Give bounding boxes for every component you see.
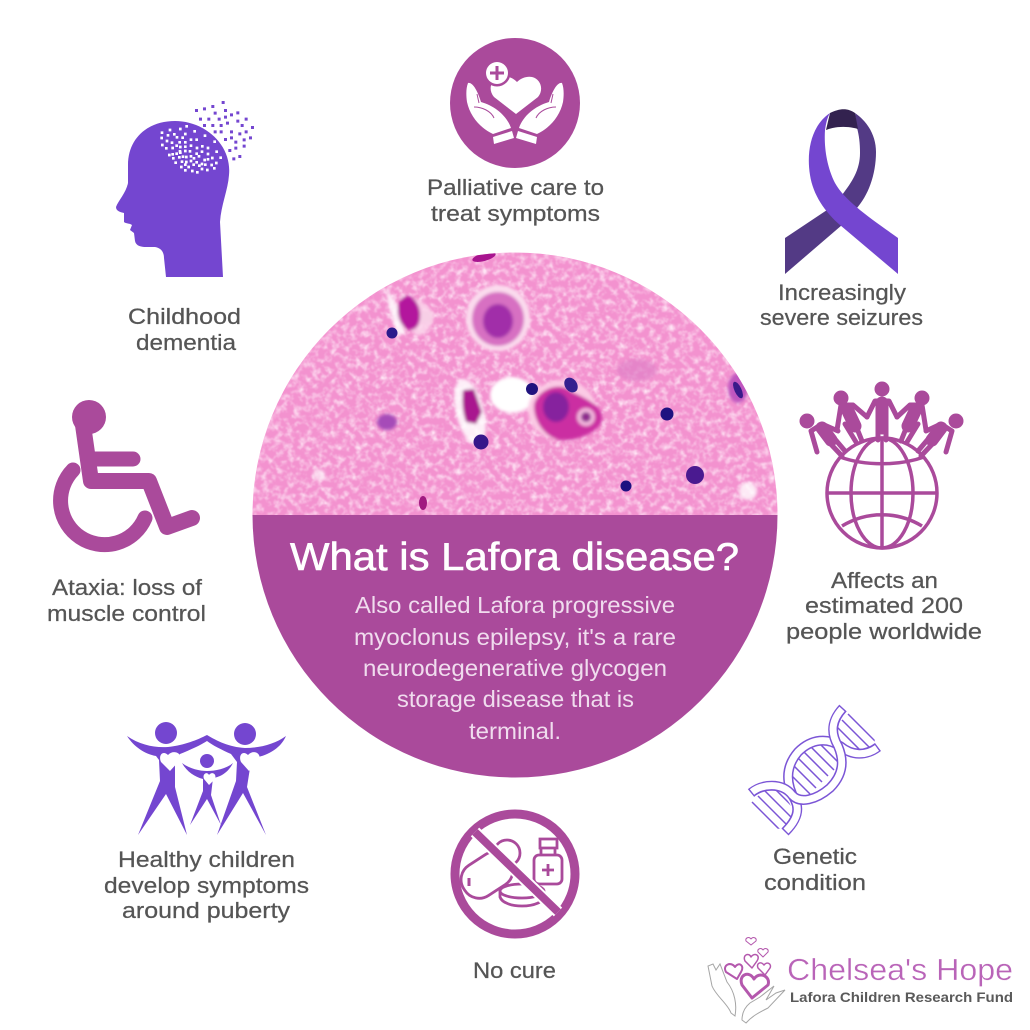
label: genetic condition bbox=[764, 844, 866, 895]
icon: wheelchair bbox=[61, 400, 192, 545]
label: seizures bbox=[760, 280, 923, 330]
description text: terminal. bbox=[469, 718, 561, 744]
icon: globe with people bbox=[800, 382, 964, 548]
label: childhood dementia: dementia bbox=[136, 330, 237, 355]
label: palliative care: Palliative care to bbox=[427, 175, 604, 200]
label: ataxia: Ataxia: loss of bbox=[52, 575, 203, 600]
logo hearts bbox=[725, 938, 770, 998]
label: childhood dementia bbox=[128, 304, 241, 355]
description text bbox=[354, 592, 676, 744]
label: no cure: No cure bbox=[473, 958, 556, 983]
heading: What is Lafora disease? bbox=[290, 536, 739, 579]
icon: DNA helix bbox=[751, 708, 878, 832]
label: genetic condition: Genetic bbox=[773, 844, 857, 869]
description text: neurodegenerative glycogen bbox=[363, 655, 667, 681]
purple text panel bbox=[252, 515, 778, 778]
icon: awareness ribbon bbox=[785, 109, 898, 274]
label: childhood dementia: Childhood bbox=[128, 304, 241, 329]
label: healthy children: develop symptoms bbox=[104, 873, 309, 898]
label: palliative care: treat symptoms bbox=[431, 201, 600, 226]
description text: storage disease that is bbox=[397, 686, 634, 712]
icon: hands holding heart bbox=[450, 38, 580, 168]
logo hands bbox=[708, 964, 785, 1023]
label: affects: Affects an bbox=[831, 568, 938, 593]
label: seizures: Increasingly bbox=[778, 280, 906, 305]
label: seizures: severe seizures bbox=[760, 305, 923, 330]
label: ataxia bbox=[47, 575, 206, 626]
label: healthy children: around puberty bbox=[122, 898, 290, 923]
label: affects: estimated 200 bbox=[805, 593, 963, 618]
micrograph image bbox=[250, 250, 780, 516]
label: ataxia: muscle control bbox=[47, 601, 206, 626]
label: healthy children bbox=[104, 847, 309, 923]
logo: Chelsea's Hope bbox=[708, 938, 1013, 1023]
label: healthy children: Healthy children bbox=[118, 847, 295, 872]
label: palliative care bbox=[427, 175, 604, 226]
label: affects bbox=[786, 568, 982, 644]
icon: head with dispersing dots bbox=[116, 101, 254, 277]
description text: Also called Lafora progressive bbox=[355, 592, 675, 618]
central circle bbox=[250, 250, 780, 778]
logo tagline: Lafora Children Research Fund bbox=[790, 989, 1013, 1005]
icon: no medicine bbox=[455, 814, 575, 934]
label: affects: people worldwide bbox=[786, 619, 982, 644]
label: genetic condition: condition bbox=[764, 870, 866, 895]
description text: myoclonus epilepsy, it's a rare bbox=[354, 624, 676, 650]
logo name: Chelsea's Hope bbox=[787, 952, 1013, 987]
icon: family bbox=[127, 722, 286, 835]
